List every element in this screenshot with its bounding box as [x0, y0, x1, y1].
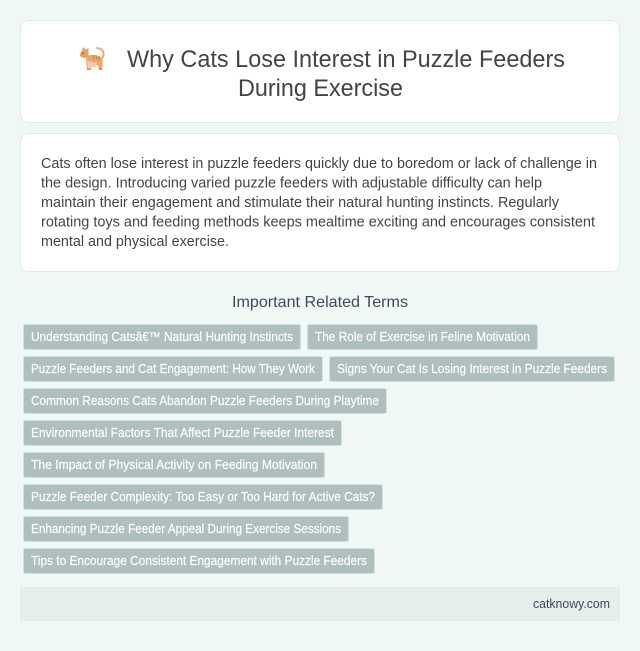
- tag 3: Puzzle Feeders and Cat Engagement: How They Work: [31, 362, 316, 376]
- tag 7: [24, 452, 324, 478]
- panel: summary text: Cats often lose interest in puzzle feeders quickly due to boredom or lack of challenge in: [41, 156, 597, 172]
- tag 2: The Role of Exercise in Feline Motivation: [315, 330, 530, 344]
- tag 6: [24, 420, 342, 446]
- footer: catknowy.com: [533, 597, 610, 611]
- tag 1: Understanding Catsâ€™ Natural Hunting Instincts: [31, 330, 293, 344]
- panel: summary text: the design. Introducing varied puzzle feeders with adjustable difficulty can help: [41, 176, 542, 192]
- tag 7: The Impact of Physical Activity on Feeding Motivation: [31, 458, 317, 472]
- tag 9: Enhancing Puzzle Feeder Appeal During Exercise Sessions: [31, 522, 341, 536]
- tag 9: [24, 516, 348, 542]
- tag 4: [330, 356, 614, 382]
- tag 10: Tips to Encourage Consistent Engagement with Puzzle Feeders: [31, 554, 367, 568]
- tag 1: [24, 324, 300, 350]
- title: During Exercise: [238, 75, 403, 102]
- footer: [20, 587, 620, 621]
- icon: cat: [80, 47, 104, 70]
- tag 4: Signs Your Cat Is Losing Interest in Puzzle Feeders: [337, 362, 607, 376]
- tag 10: [24, 548, 374, 574]
- tag 8: Puzzle Feeder Complexity: Too Easy or Too Hard for Active Cats?: [31, 490, 375, 504]
- tag 6: Environmental Factors That Affect Puzzle Feeder Interest: [31, 426, 334, 440]
- title: [127, 46, 565, 102]
- panel: summary text: mental and physical exercise.: [41, 234, 229, 250]
- panel: summary text: rotating toys and feeding methods keeps mealtime exciting and encourages consistent: [41, 214, 595, 230]
- panel: title header: [20, 20, 620, 122]
- tag 5: Common Reasons Cats Abandon Puzzle Feeders During Playtime: [31, 394, 379, 408]
- heading: related terms: Important Related Terms: [232, 294, 408, 311]
- tag 8: [24, 484, 382, 510]
- title: Why Cats Lose Interest in Puzzle Feeders: [127, 46, 565, 73]
- tag 3: [24, 356, 322, 382]
- panel: summary text: [20, 134, 620, 272]
- tag 2: [308, 324, 538, 350]
- tag 5: [24, 388, 386, 414]
- panel: summary text: maintain their engagement and stimulate their natural hunting instincts. Regularly: [41, 195, 560, 211]
- tag list: related terms: [24, 324, 614, 574]
